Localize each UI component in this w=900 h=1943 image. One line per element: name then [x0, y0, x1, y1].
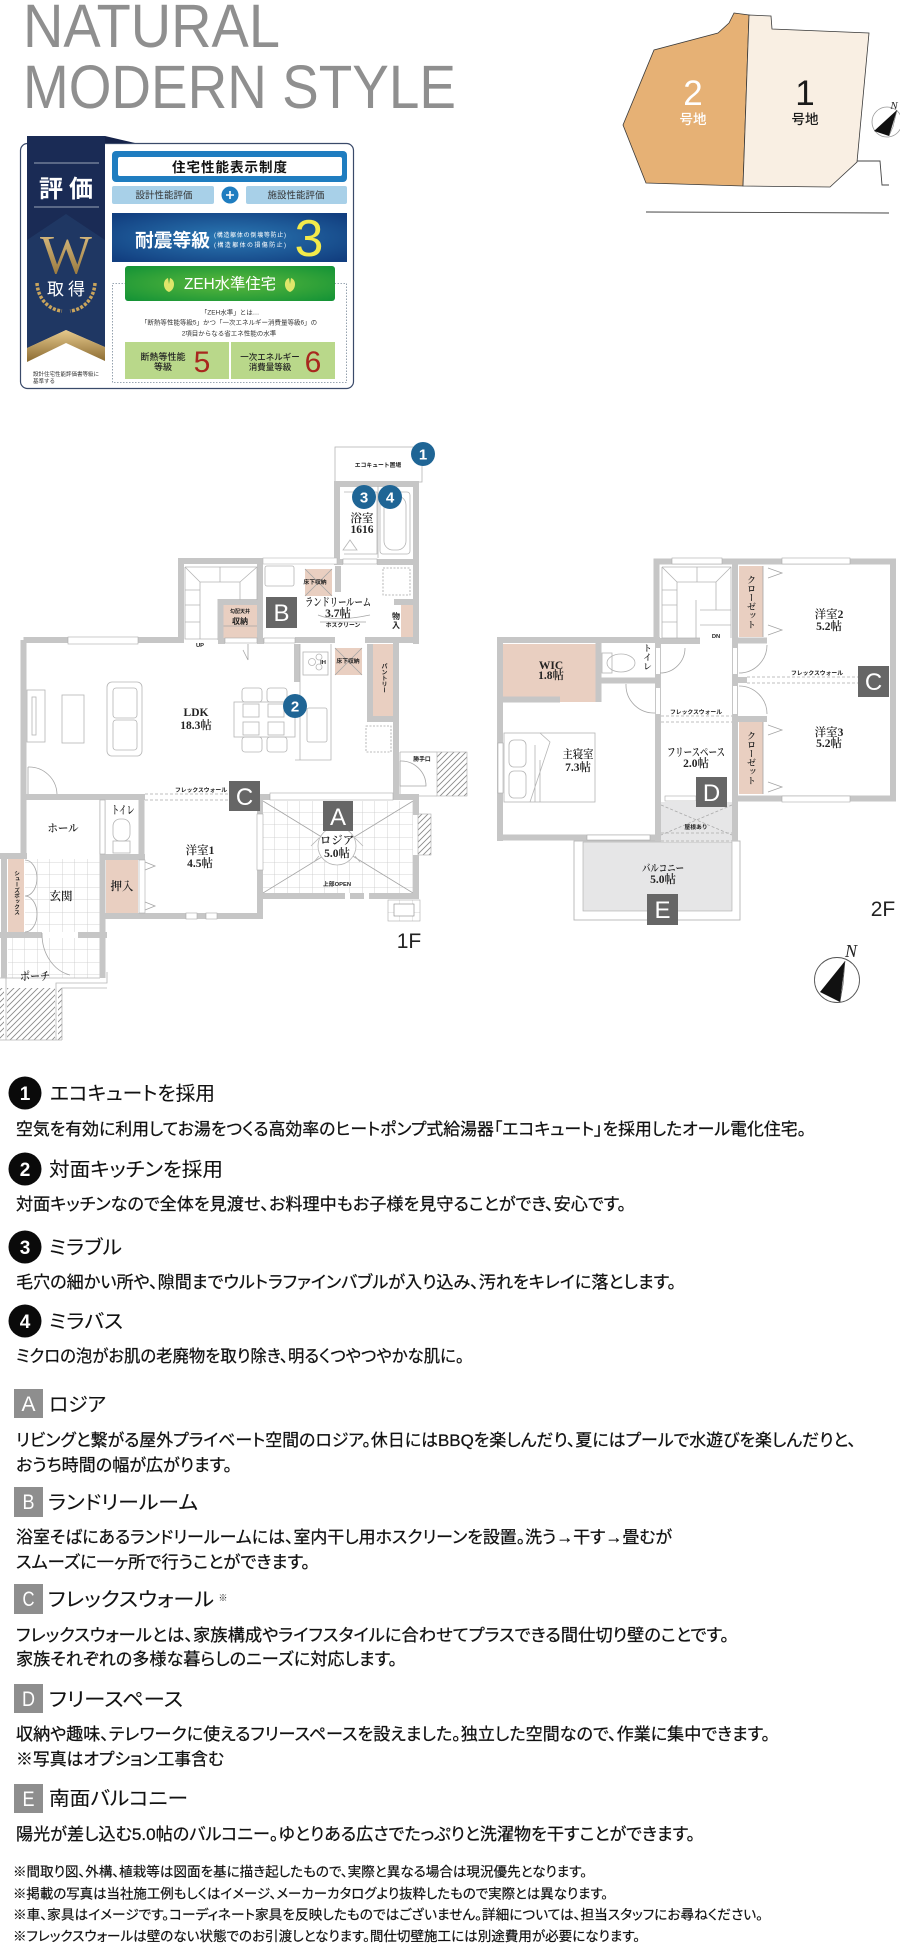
room labels: バルコニー: [642, 863, 684, 875]
room labels: 物: [392, 611, 400, 621]
dotted ZEH frame: [112, 284, 346, 382]
room labels: 3.7帖: [325, 606, 351, 620]
room labels: 勾配天井: [230, 608, 250, 615]
marker 4: 4: [386, 490, 395, 506]
marker B: [266, 597, 297, 628]
windows: [498, 558, 850, 840]
lot 1: 号地: [792, 112, 819, 127]
room labels: 2.0帖: [683, 756, 709, 770]
room labels: トイレ: [642, 644, 652, 670]
bed and toilet: [504, 653, 635, 802]
room labels: 入: [392, 621, 400, 630]
item 2: [8, 1152, 626, 1214]
dotted appliance outlines: [366, 568, 410, 752]
room labels: 7.3帖: [565, 760, 591, 774]
primary energy grade 6: 6: [305, 346, 321, 379]
earthquake resistance grade 3: (構造躯体の倒壊等防止): [214, 231, 286, 239]
room fills: storage: [8, 569, 413, 932]
item B: スムーズに一ヶ所で行うことができます。: [16, 1553, 310, 1572]
stairs: [185, 567, 257, 639]
item C: C: [22, 1588, 34, 1611]
room labels: エコキュート置場: [355, 461, 401, 469]
ribbon: 評価: [39, 176, 93, 203]
eco cute pad: [335, 447, 422, 482]
insulation grade 5: [125, 342, 229, 379]
room labels: 5.0帖: [324, 846, 350, 860]
room labels: [538, 575, 844, 886]
room labels: 勝手口: [413, 755, 431, 763]
room labels: LDK: [184, 707, 209, 719]
marker 1: [411, 442, 435, 466]
marker A: [323, 801, 353, 831]
design and construction evaluation: [112, 186, 347, 204]
marker 2: [283, 694, 307, 718]
ZEH explanation: 2項目からなる省エネ性能の水準: [182, 328, 277, 338]
room labels: IH: [320, 660, 326, 666]
insulation grade 5: 5: [194, 346, 210, 379]
flex wall dashed lines: [661, 677, 858, 722]
ZEH explanation: [141, 308, 317, 338]
item E: 陽光が差し込む5.0帖のバルコニー。ゆとりある広さでたっぷりと洗濯物を干すことができます。: [16, 1825, 695, 1844]
room labels: 5.2帖: [816, 736, 842, 750]
room labels: DN: [712, 634, 720, 640]
room labels: ランドリールーム: [305, 597, 371, 609]
room labels: 洋室2: [815, 607, 844, 621]
item 1: 1: [20, 1084, 31, 1105]
walls: [497, 561, 893, 841]
item 4: [8, 1304, 464, 1366]
marker 2: 2: [291, 698, 299, 716]
room labels: 5.2帖: [816, 619, 842, 633]
ZEH banner: [125, 266, 335, 301]
item C: [14, 1584, 729, 1669]
insulation grade 5: 等級: [154, 361, 172, 372]
marker E: [647, 894, 678, 925]
primary energy grade 6: [231, 342, 335, 379]
item 2: 対面キッチンを採用: [49, 1159, 223, 1181]
item 1: エコキュートを採用: [50, 1083, 215, 1105]
icon: compass: N: [844, 941, 858, 961]
marker C: C: [865, 669, 882, 696]
item B: B: [22, 1491, 34, 1514]
room labels: 洋室3: [815, 725, 844, 739]
room labels: 上部OPEN: [323, 880, 351, 888]
room labels: 床下収納: [303, 578, 327, 586]
feature list: numbered items: [8, 1076, 806, 1366]
item 4: ミラバス: [49, 1311, 123, 1333]
ribbon: [27, 136, 135, 385]
door arcs: [25, 644, 426, 975]
lot 1: 1: [795, 74, 815, 113]
room labels: 浴室: [350, 511, 374, 525]
ZEH explanation: 「ZEH水準」とは…: [201, 308, 259, 316]
icon: small compass: N: [889, 100, 898, 112]
stairs: [662, 567, 731, 638]
walls: [0, 484, 419, 978]
item D: ※写真はオプション工事含む: [16, 1750, 224, 1769]
room labels: クローゼット: [746, 575, 756, 629]
footnotes: ※車、家具はイメージです。コーディネート家具を反映したものではございません。詳細については、担当スタッフにお尋ねください。: [13, 1906, 763, 1922]
room labels: シューズボックス: [13, 871, 20, 916]
room labels: 18.3帖: [180, 718, 212, 732]
earthquake resistance grade 3: 耐震等級: [135, 230, 210, 251]
tiled floors: [8, 801, 420, 978]
balcony and roof: [574, 802, 740, 920]
room labels: 4.5帖: [187, 856, 213, 870]
ribbon: 設計住宅性能評価書等級に: [33, 370, 99, 378]
design and construction evaluation: 施設性能評価: [267, 190, 325, 202]
item 1: [8, 1076, 806, 1139]
marker 3: 3: [360, 490, 368, 506]
marker B: B: [273, 600, 290, 627]
primary energy grade 6: 消費量等級: [249, 362, 292, 372]
footnotes: ※間取り図、外構、植栽等は図面を基に描き起したもので、実際と異なる場合は現況優先となります。: [13, 1864, 587, 1880]
room labels: 屋根あり: [684, 823, 708, 831]
insulation grade 5: 断熱等性能: [140, 351, 186, 362]
footnotes: ※掲載の写真は当社施工例もしくはイメージ、メーカーカタログより抜粋したもので実際とは異なります。: [13, 1886, 608, 1902]
furniture: [27, 486, 410, 865]
windows and openings: [68, 558, 393, 919]
marker C: C: [236, 784, 253, 811]
marker 4: [378, 485, 402, 509]
item A: A: [22, 1393, 36, 1416]
item D: D: [22, 1688, 35, 1711]
room labels: 洋室1: [186, 843, 215, 857]
icon: compass: [814, 941, 860, 1002]
item A: ロジア: [49, 1394, 106, 1416]
room labels: 1.8帖: [538, 668, 564, 682]
room labels: ロジア: [320, 834, 354, 847]
item 4: 4: [20, 1312, 31, 1333]
title: [23, 0, 456, 121]
panel: performance evaluation badge: [20, 136, 354, 388]
ribbon: 取得: [47, 280, 85, 299]
floor plan: 2F: [497, 558, 895, 1002]
ZEH banner: ZEH水準住宅: [184, 275, 276, 293]
lot 2: [623, 13, 749, 186]
marker 3: [352, 485, 376, 509]
icon: small compass: [872, 100, 900, 137]
room labels: WIC: [539, 660, 563, 672]
item D: [14, 1684, 770, 1769]
room labels: [13, 461, 431, 983]
item C: フレックスウォールとは、家族構成やライフスタイルに合わせてプラスできる間仕切り壁のことです。: [16, 1626, 729, 1645]
item 2: 2: [20, 1160, 30, 1181]
floor label 2F: 2F: [871, 898, 895, 921]
marker C: [858, 666, 889, 697]
doors: [626, 566, 782, 794]
item 3: 毛穴の細かい所や、隙間までウルトラファインバブルが入り込み、汚れをキレイに落とします。: [16, 1272, 676, 1292]
item E: 南面バルコニー: [49, 1788, 188, 1810]
room labels: フレックスウォール: [791, 669, 843, 677]
earthquake resistance grade 3: 3: [295, 210, 323, 268]
room labels: クローゼット: [746, 731, 756, 785]
room labels: フリースペース: [667, 747, 725, 759]
item B: ランドリールーム: [48, 1492, 198, 1514]
design and construction evaluation: 設計性能評価: [135, 190, 193, 202]
feature list: lettered items: [14, 1389, 856, 1844]
ribbon: 基準する: [33, 377, 55, 385]
item A: [14, 1389, 856, 1475]
item D: 収納や趣味、テレワークに使えるフリースペースを設えました。独立した空間なので、作業に集中できます。: [16, 1724, 770, 1744]
marker 1: 1: [419, 446, 427, 464]
marker A: A: [330, 804, 346, 831]
item E: E: [22, 1788, 34, 1811]
room labels: 収納: [232, 616, 248, 626]
item 1: 空気を有効に利用してお湯をつくる高効率のヒートポンプ式給湯器「エコキュート」を採用したオール電化住宅。: [16, 1120, 806, 1139]
room labels: パントリー: [380, 663, 387, 693]
item B: 浴室そばにあるランドリールームには、室内干し用ホスクリーンを設置。洗う→干す→畳むが: [16, 1528, 672, 1547]
room labels: 主寝室: [562, 747, 594, 761]
room labels: ポーチ: [20, 970, 50, 983]
item 3: [8, 1230, 676, 1292]
item B: [14, 1487, 672, 1572]
floor plan: 1F: [0, 442, 467, 1040]
item A: おうち時間の幅が広がります。: [16, 1456, 232, 1475]
hatched outdoor areas: [0, 752, 467, 1040]
item A: リビングと繋がる屋外プライベート空間のロジア。休日にはBBQを楽しんだり、夏にはプールで水遊びを楽しんだりと、: [16, 1431, 856, 1450]
room labels: ホスクリーン: [326, 621, 360, 629]
room labels: フレックスウォール: [175, 786, 227, 794]
room labels: UP: [196, 643, 204, 649]
room labels: 玄関: [50, 889, 72, 903]
lot 2: 2: [683, 74, 703, 113]
ribbon: W: [40, 224, 92, 285]
lot 1: [743, 15, 869, 187]
item 2: 対面キッチンなので全体を見渡せ、お料理中もお子様を見守ることができ、安心です。: [16, 1195, 626, 1214]
ZEH explanation: 「断熱等性能等級5」かつ「一次エネルギー消費量等級6」の: [141, 318, 317, 326]
marker D: D: [703, 780, 720, 807]
marker E: E: [654, 897, 671, 924]
flex wall dashed line: [145, 794, 229, 800]
storage fills: [503, 566, 763, 794]
title: MODERN STYLE: [23, 53, 456, 121]
item C: フレックスウォール: [48, 1589, 214, 1611]
room labels: 1616: [350, 524, 374, 536]
lot 2: 号地: [680, 112, 707, 127]
room labels: フレックスウォール: [670, 708, 722, 716]
room labels: 床下収納: [336, 657, 360, 665]
item E: [14, 1784, 695, 1844]
item C: ※: [218, 1593, 228, 1603]
floor label 1F: 1F: [397, 930, 421, 953]
item 4: ミクロの泡がお肌の老廃物を取り除き、明るくつやつやかな肌に。: [16, 1347, 464, 1366]
site map: [623, 13, 900, 213]
room labels: ホール: [48, 822, 79, 835]
earthquake resistance grade 3: [112, 210, 347, 268]
earthquake resistance grade 3: (構造躯体の損傷防止): [214, 241, 286, 249]
item D: フリースペース: [49, 1689, 183, 1711]
clothes drying pole: [318, 615, 370, 622]
marker C: [229, 781, 260, 811]
primary energy grade 6: 一次エネルギー: [240, 352, 300, 362]
item C: 家族それぞれの多様な暮らしのニーズに対応します。: [16, 1650, 397, 1669]
room labels: トイレ: [112, 805, 134, 817]
heading: housing performance display: [112, 151, 347, 182]
item 3: ミラブル: [49, 1236, 122, 1259]
heading: housing performance display: 住宅性能表示制度: [172, 159, 288, 175]
room labels: 5.0帖: [650, 872, 676, 886]
item 3: 3: [20, 1238, 30, 1259]
marker D: [696, 777, 727, 807]
room labels: 押入: [110, 879, 134, 893]
footnotes: [13, 1864, 763, 1943]
